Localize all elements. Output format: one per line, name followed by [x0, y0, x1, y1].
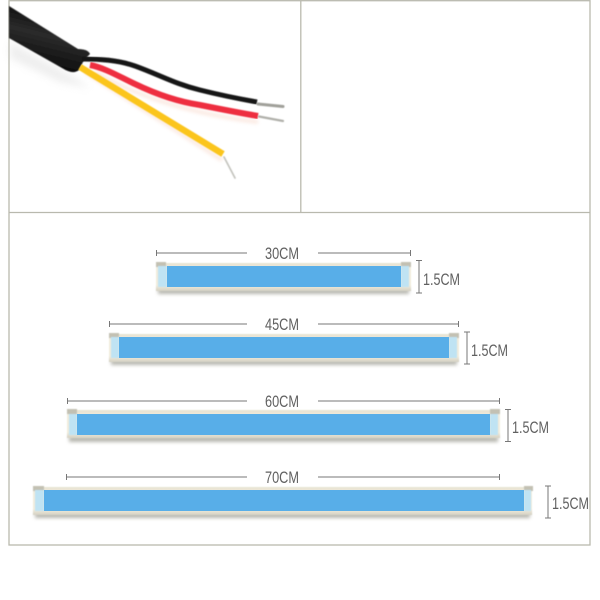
width dimension: [545, 486, 551, 518]
blue light panel: [167, 266, 401, 287]
width label: 1.5CM: [512, 418, 549, 437]
body: [33, 486, 533, 515]
bare copper tips: [224, 104, 283, 178]
strip: 60CM: [67, 392, 549, 442]
length dimension: [110, 321, 458, 327]
blue light panel: [119, 337, 449, 358]
length label: 30CM: [265, 244, 299, 263]
width dimension: [416, 260, 422, 293]
strip: 30CM: [156, 244, 460, 294]
length label: 70CM: [265, 468, 299, 487]
length dimension: [68, 398, 500, 404]
body: [67, 409, 500, 438]
length label: 45CM: [265, 315, 299, 334]
shadow: [69, 436, 498, 442]
black wire: [82, 59, 257, 102]
shadow: [111, 359, 457, 365]
width dimension: [464, 332, 470, 364]
blue light panel: [77, 414, 490, 435]
length dimension: [156, 250, 410, 256]
body: [109, 333, 459, 362]
body: [156, 262, 411, 291]
yellow wire: [80, 67, 223, 154]
width dimension: [505, 410, 511, 442]
photo: cable with three wires: [9, 6, 283, 178]
cable shadow: [10, 42, 90, 88]
shadow: [35, 512, 530, 518]
wire shadows: [85, 72, 258, 160]
width label: 1.5CM: [471, 341, 508, 360]
length dimension: [66, 474, 500, 480]
black outer sheath: [9, 6, 90, 72]
red wire: [90, 65, 258, 116]
strip: 45CM: [109, 315, 508, 365]
shadow: [158, 288, 409, 294]
blue light panel: [44, 490, 524, 511]
width label: 1.5CM: [423, 270, 460, 289]
strip: 70CM: [33, 468, 589, 518]
length label: 60CM: [265, 392, 299, 411]
